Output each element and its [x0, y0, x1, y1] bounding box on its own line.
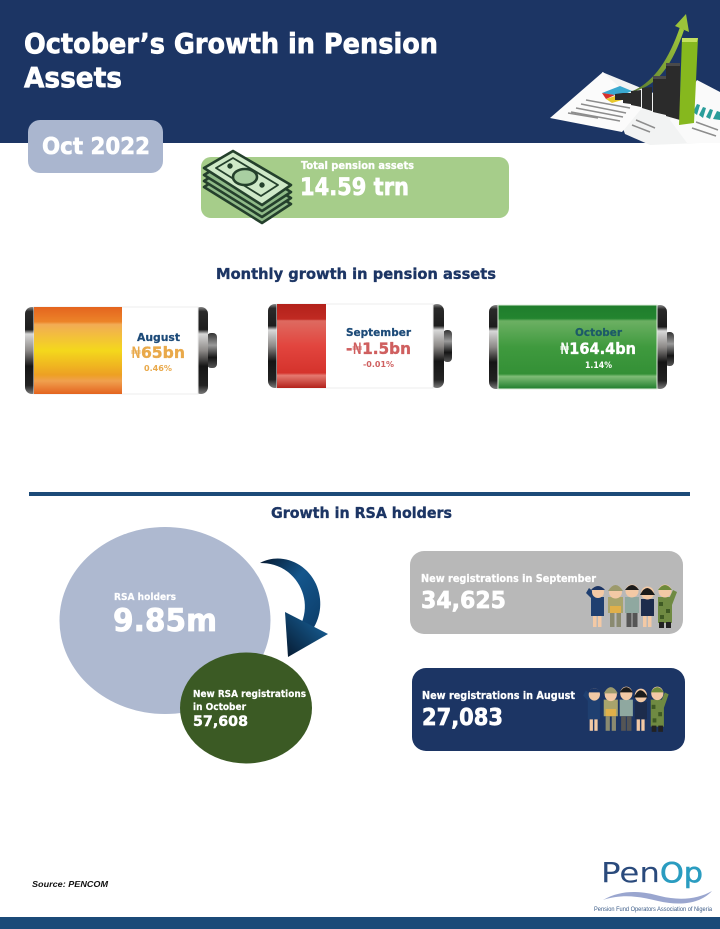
arrow: curved down — [260, 559, 328, 657]
source note: Source: PENCOM — [32, 879, 109, 889]
panel: total pension assets: 14.59 trn — [300, 173, 409, 201]
battery: September: -0.01% — [363, 360, 394, 369]
footer bar — [0, 917, 720, 929]
panel: new registrations in August: New registrations in August — [422, 690, 575, 702]
battery: September: -₦1.5bn — [346, 339, 411, 358]
title: October’s Growth in Pension — [24, 27, 438, 60]
logo: PenOp: Op — [660, 856, 703, 889]
battery: October — [489, 305, 674, 389]
battery: August — [25, 307, 217, 394]
icon: stack of money — [204, 151, 291, 223]
logo: PenOp — [594, 856, 713, 913]
illustration: reports and growth chart — [550, 14, 720, 145]
panel: total pension assets: Total pension assets — [301, 160, 414, 172]
panel: new registrations in September: 34,625 — [421, 588, 506, 614]
battery: August: August — [137, 331, 180, 344]
logo: PenOp: Pen — [601, 856, 660, 889]
battery: October: 1.14% — [585, 361, 612, 371]
battery: September — [268, 304, 452, 388]
circle: new RSA registrations in October — [180, 652, 312, 764]
circle: new RSA registrations in October: 57,608 — [193, 714, 248, 730]
battery: October: October — [575, 326, 623, 339]
badge: Oct 2022: Oct 2022 — [42, 134, 150, 160]
battery: August: ₦65bn — [131, 343, 185, 362]
heading: monthly growth: Monthly growth in pension assets — [216, 265, 496, 283]
panel: new registrations in September: New registrations in September — [421, 573, 597, 585]
circle: new RSA registrations in October: New RSA registrations — [193, 689, 306, 700]
circle: RSA holders — [60, 527, 270, 714]
badge: Oct 2022 — [28, 120, 163, 173]
icon: group of workers — [583, 687, 669, 732]
panel: new registrations in September — [410, 551, 683, 634]
icon: group of workers — [586, 584, 677, 628]
panel: new registrations in August: 27,083 — [422, 705, 503, 731]
battery: September: September — [346, 326, 412, 339]
title — [24, 27, 438, 94]
circle: RSA holders: 9.85m — [113, 603, 217, 639]
title: Assets — [24, 61, 122, 94]
panel: total pension assets — [201, 151, 509, 223]
battery: October: ₦164.4bn — [560, 339, 636, 358]
logo: PenOp: Pension Fund Operators Association of Nigeria — [594, 907, 713, 913]
battery: August: 0.46% — [144, 364, 172, 373]
circle: new RSA registrations in October: in October — [193, 702, 246, 713]
circle: RSA holders: RSA holders — [114, 592, 176, 603]
panel: new registrations in August — [412, 668, 685, 751]
header banner — [0, 0, 720, 143]
heading: RSA holders: Growth in RSA holders — [271, 504, 452, 522]
